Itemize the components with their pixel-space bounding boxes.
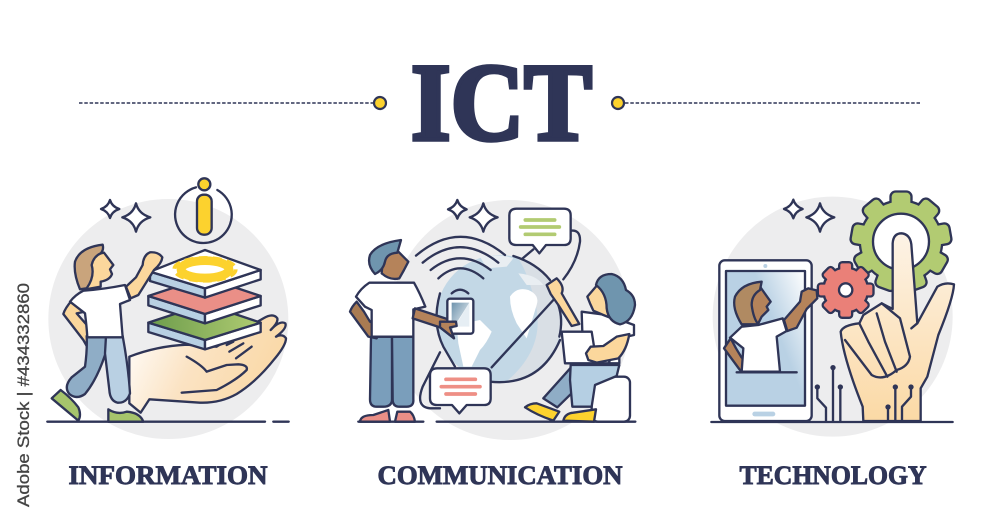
ground line xyxy=(47,418,289,425)
person: right xyxy=(525,274,635,422)
stock id text: Adobe Stock | #434332860 xyxy=(14,283,33,507)
panel: communication xyxy=(350,200,635,440)
globe xyxy=(420,255,563,408)
chat bubble: green xyxy=(509,209,580,279)
heading: communication: COMMUNICATION xyxy=(378,461,623,490)
chat bubble: pink xyxy=(430,368,491,413)
green gear xyxy=(851,193,951,291)
person xyxy=(52,245,162,422)
title: ICT xyxy=(411,42,592,164)
stacked layers xyxy=(148,250,261,349)
background circle xyxy=(713,197,953,437)
background circle xyxy=(390,200,630,440)
panel: technology xyxy=(711,193,954,437)
ground line xyxy=(711,418,953,425)
person in phone xyxy=(724,282,817,372)
right title connector xyxy=(612,97,921,109)
circuit nodes xyxy=(815,365,914,410)
red gear xyxy=(819,263,872,317)
icon: sparkles xyxy=(448,200,498,232)
heading: information: INFORMATION xyxy=(68,461,268,490)
left title connector xyxy=(79,97,386,109)
icon: sparkles xyxy=(784,200,834,232)
circuit traces xyxy=(817,368,911,421)
icon: sparkles xyxy=(101,200,150,232)
smartphone xyxy=(719,260,812,421)
heading: technology: TECHNOLOGY xyxy=(740,461,927,490)
background circle xyxy=(48,199,288,439)
hand xyxy=(129,315,286,413)
tablet device xyxy=(440,299,473,338)
icon: wifi arcs xyxy=(416,237,505,293)
person: left xyxy=(350,240,457,422)
gear on top layer xyxy=(174,258,236,281)
ground line xyxy=(358,418,635,425)
icon: info symbol xyxy=(175,178,232,243)
panel: information xyxy=(47,178,289,439)
hand pointing xyxy=(841,233,954,421)
